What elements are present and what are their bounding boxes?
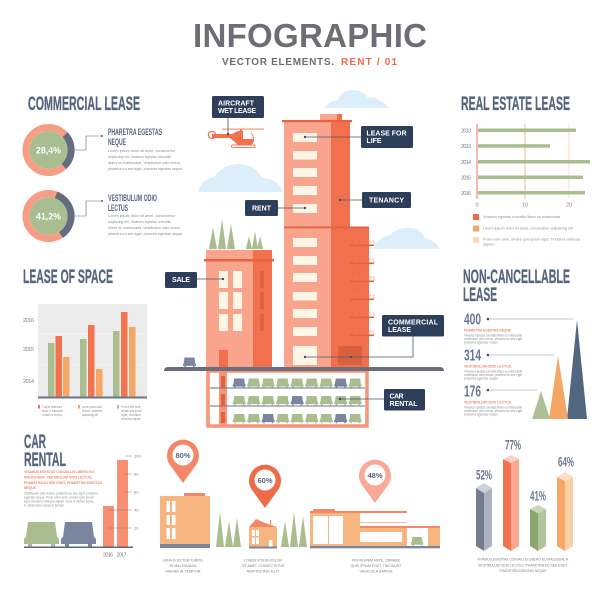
- panel: car rental: [24, 432, 141, 558]
- caption: 3D bar chart: VESTIBULUM ODIO LECTUS, PHARETRA EU SEE EGET,: [478, 564, 568, 568]
- building: house: [249, 519, 277, 548]
- small car on road: [183, 358, 196, 367]
- chart legend: Proin enim ante,: [121, 405, 141, 409]
- label: sale: SALE: [172, 277, 190, 284]
- chart legend: sit amet, consectetur: [82, 409, 104, 413]
- label: rent: RENT: [252, 206, 272, 212]
- chart legend: Vivamus egestas convallis libero eu malesuada: [483, 215, 560, 219]
- horizontal bar chart: 10: [522, 202, 528, 208]
- label: aircraft wet lease: [212, 96, 264, 135]
- tall tower: [282, 114, 369, 367]
- label: sale: [165, 272, 224, 288]
- caption: office block: MASSA IN TEMPOR: [166, 570, 201, 574]
- caption: 3D bar chart: VIVAMUS EGESTAS CONVALLIS LIBERO EU MALESUADA.: [477, 558, 569, 562]
- stat: 176: Vivamus egestas convallis libero eu malesuada: [464, 406, 522, 410]
- pin: 80%: 80%: [175, 451, 191, 460]
- text block: car rental description: MALESUADA. VESTIBULUM ODIO LECTUS,: [24, 476, 92, 480]
- heading: commercial lease: COMMERCIAL LEASE: [28, 94, 140, 115]
- text block: vestibulum odio: libero eu malesuada. Vestibulum odio lectus,: [108, 226, 181, 230]
- label: tenancy: [339, 192, 411, 208]
- caption: 3D bar chart: [477, 558, 569, 573]
- text block: vestibulum odio: Lorem ipsum dolor sit amet, consectetur: [108, 214, 176, 218]
- label: lease for life: LIFE: [366, 138, 382, 145]
- column chart: 20: [134, 526, 139, 530]
- pin: 60%: [249, 465, 281, 508]
- label: commercial lease: [304, 315, 444, 358]
- caption: low-rise: QUIS IPSUM EGET, TINCIDUNT: [350, 564, 402, 568]
- column chart: [24, 454, 141, 558]
- label: rent: [245, 200, 306, 216]
- horizontal bar chart: 2016: [461, 191, 471, 197]
- heading: lease of space: LEASE OF SPACE: [23, 267, 113, 288]
- chart legend: sapien: [483, 242, 494, 246]
- text block: pharetra egestas: libero eu malesuada. Vestibulum odio lectus,: [108, 161, 181, 165]
- chart legend: massa eu tempor: [42, 413, 63, 417]
- donut: 28,4%: [26, 128, 72, 172]
- label: car rental: CAR: [390, 394, 404, 400]
- text block: pharetra egestas: pharetra eu see eget, pharetra egestas neque.: [108, 167, 183, 171]
- caption: low-rise: [350, 558, 402, 574]
- chart legend: Lorem ipsum dolor sit amet, consectetur adipiscing elit: [483, 226, 573, 230]
- pin: 48%: [359, 460, 391, 503]
- text block: pharetra egestas: adipiscing elit. Vivamus egestas convallis: [108, 155, 171, 159]
- text block: vestibulum odio: LECTUS: [108, 203, 128, 214]
- stat: 400: PHARETRA EGESTAS NEQUE: [464, 328, 511, 332]
- text block: car rental description: egestas neque. Proin enim ante, ornare quis ipsum: [24, 496, 94, 500]
- pin: 60%: 60%: [257, 476, 273, 485]
- label: aircraft wet lease: AIRCRAFT: [218, 100, 255, 108]
- trees: [216, 512, 307, 547]
- bar: 41%: 41%: [530, 488, 546, 504]
- panel: 3D bar chart: [476, 436, 574, 573]
- text block: pharetra egestas: NEQUE: [108, 137, 126, 148]
- chart legend: eget, tincidunt: [121, 413, 141, 417]
- building: low-rise with garage: [310, 509, 440, 548]
- building: office block: [160, 493, 210, 548]
- panel: central building scene: [164, 90, 444, 426]
- stat: 176: pharetra egestas neque: [464, 412, 498, 416]
- text block: car rental description: VIVAMUS EGESTAS CONVALLIS LIBERO EU: [24, 470, 94, 474]
- chart legend: neque, in malesuada: [42, 409, 63, 413]
- label: tenancy: TENANCY: [369, 198, 404, 204]
- horizontal bar chart: 2013: [461, 144, 471, 150]
- stat: 314: 314: [464, 348, 481, 364]
- text block: vestibulum odio: adipiscing elit. Vivamus egestas convallis: [108, 220, 171, 224]
- stat: 400: pharetra egestas neque: [464, 340, 498, 344]
- stat: 314: Vivamus egestas convallis libero eu malesuada: [464, 370, 522, 374]
- caption: house: SIT AMET, CONSECTETUR: [242, 564, 285, 568]
- title: VECTOR ELEMENTS.: [222, 57, 334, 68]
- caption: low-rise: PROIN ENIM ANTE, ORNARE: [352, 558, 401, 562]
- chart legend: ornare quis ipsum: [121, 409, 142, 413]
- stat: 176: [464, 384, 537, 416]
- text block: car rental description: Vestibulum odio lectus, pharetra eu see eget, pharetra: [24, 492, 98, 496]
- column chart: 2017: [116, 552, 126, 558]
- stat: 314: vestibulum odio lectus, pharetra eu see eget: [464, 373, 522, 377]
- column chart: 2016: [103, 552, 113, 558]
- icon: helicopter: [208, 128, 264, 148]
- text block: car rental description: in malesuada massa in tempor: [24, 504, 65, 508]
- balconies: [350, 241, 374, 336]
- text block: vestibulum odio: pharetra eu see eget, pharetra egestas neque.: [108, 232, 183, 236]
- label: car rental: [339, 389, 425, 410]
- horizontal bar chart: 0: [476, 202, 479, 208]
- caption: office block: [162, 558, 204, 574]
- panel: location buildings: [160, 440, 440, 574]
- rooftop trees: [209, 219, 263, 249]
- stat: 314: pharetra egestas neque: [464, 376, 498, 380]
- caption: house: LOREM IPSUM DOLOR: [244, 558, 282, 562]
- left building: [204, 250, 274, 367]
- chart legend: [38, 405, 142, 421]
- panel: non-cancellable lease: [463, 267, 587, 419]
- column chart: [23, 304, 147, 398]
- bar: 64%: 64%: [558, 454, 574, 470]
- donut: 41,2%: [26, 194, 71, 238]
- label: commercial lease: LEASE: [388, 327, 411, 334]
- caption: 3D bar chart: PHARETRA EGESTAS NEQUE: [500, 569, 547, 573]
- stat: 400: vestibulum odio lectus, pharetra eu see eget: [464, 337, 522, 341]
- title: RENT / 01: [341, 57, 397, 68]
- text block: vestibulum odio: VESTIBULUM ODIO: [108, 193, 157, 204]
- horizontal bar chart: 20: [566, 202, 572, 208]
- stat: 400: [464, 312, 573, 344]
- heading: non-cancellable lease: [463, 267, 570, 306]
- text block: car rental description: PHARETRA EU SEE EGET, PHARETRA EGESTAS: [24, 481, 102, 485]
- pin: 80%: [167, 440, 199, 483]
- stat: 314: [464, 348, 554, 380]
- donut: 41,2%: 41,2%: [36, 212, 62, 222]
- heading: car rental: RENTAL: [24, 450, 66, 471]
- pin: 48%: 48%: [367, 471, 383, 480]
- caption: house: ADIPISCING ELIT: [246, 570, 280, 574]
- stat: 176: VESTIBULUM ODIO LECTUS: [464, 400, 511, 404]
- column chart: 60: [134, 490, 139, 494]
- caption: house: [242, 558, 285, 574]
- heading: car rental: CAR: [24, 432, 46, 453]
- chart legend: vehicula sapien: [121, 417, 141, 421]
- column chart: 2016: [23, 318, 34, 324]
- label: commercial lease: COMMERCIAL: [388, 320, 439, 326]
- bar: 52%: 52%: [476, 466, 492, 482]
- stat: 314: VESTIBULUM ODIO LECTUS: [464, 364, 511, 368]
- text block: pharetra egestas: PHARETRA EGESTAS: [108, 127, 162, 138]
- donut: 28,4%: 28,4%: [36, 146, 62, 156]
- column chart: 2015: [23, 347, 34, 353]
- label: aircraft wet lease: WET LEASE: [218, 108, 256, 115]
- horizontal bar chart: 2013: [461, 128, 471, 134]
- chart legend: Proin enim ante, ornare quis ipsum eget. Tincidunt vehicula: [483, 238, 580, 242]
- label: lease for life: LEASE FOR: [366, 130, 406, 138]
- column chart: 80: [134, 472, 139, 476]
- column chart: 100: [134, 454, 141, 458]
- bar: 77%: 77%: [505, 436, 521, 452]
- stat: 400: 400: [464, 312, 481, 328]
- chart legend: [473, 214, 580, 246]
- panel: real estate lease: [461, 94, 590, 246]
- stat: 176: 176: [464, 384, 481, 400]
- text block: vestibulum odio: [108, 193, 183, 236]
- heading: non-cancellable lease: LEASE: [463, 285, 497, 306]
- text block: car rental description: [24, 470, 102, 508]
- text block: pharetra egestas: [108, 127, 183, 171]
- text block: car rental description: NEQUE: [24, 486, 36, 490]
- label: lease for life: [304, 126, 413, 148]
- clouds: [198, 90, 440, 249]
- panel: commercial lease: [26, 94, 183, 238]
- horizontal bar chart: 2014: [461, 160, 471, 166]
- triangle chart: [532, 320, 587, 419]
- horizontal bar chart: 2015: [461, 176, 471, 182]
- road: [164, 367, 444, 371]
- connector arrow: [74, 135, 103, 150]
- text block: car rental description: eget, tincidunt vehicula sapien. Urna si dictum turpis,: [24, 500, 94, 504]
- chart legend: Lorem ipsum dolor: [82, 405, 103, 409]
- panel: lease of space: [23, 267, 147, 421]
- underground car park: [208, 371, 367, 426]
- label: car rental: RENTAL: [390, 401, 418, 408]
- column chart: 2014: [23, 379, 34, 385]
- icon: blue car: [61, 522, 96, 547]
- chart legend: Turpis tincidunt: [42, 405, 62, 409]
- horizontal bar chart: [461, 124, 590, 208]
- icon: green car: [24, 522, 59, 547]
- stat: 176: vestibulum odio lectus, pharetra eu see eget: [464, 409, 522, 413]
- title: INFOGRAPHIC: [193, 17, 427, 54]
- text block: pharetra egestas: Lorem ipsum dolor sit amet, consectetur: [108, 149, 176, 153]
- stat: 400: Vivamus egestas convallis libero eu malesuada: [464, 334, 522, 338]
- chart legend: adipiscing elit: [82, 413, 98, 417]
- column chart: 40: [134, 508, 139, 512]
- connector arrow: [74, 200, 103, 216]
- caption: office block: IN MALESUADA: [170, 564, 197, 568]
- heading: car rental: [24, 432, 66, 471]
- caption: low-rise: VEHICULA SAPIEN: [360, 570, 393, 574]
- caption: office block: URNA SI DICTUM TURPIS,: [162, 558, 204, 562]
